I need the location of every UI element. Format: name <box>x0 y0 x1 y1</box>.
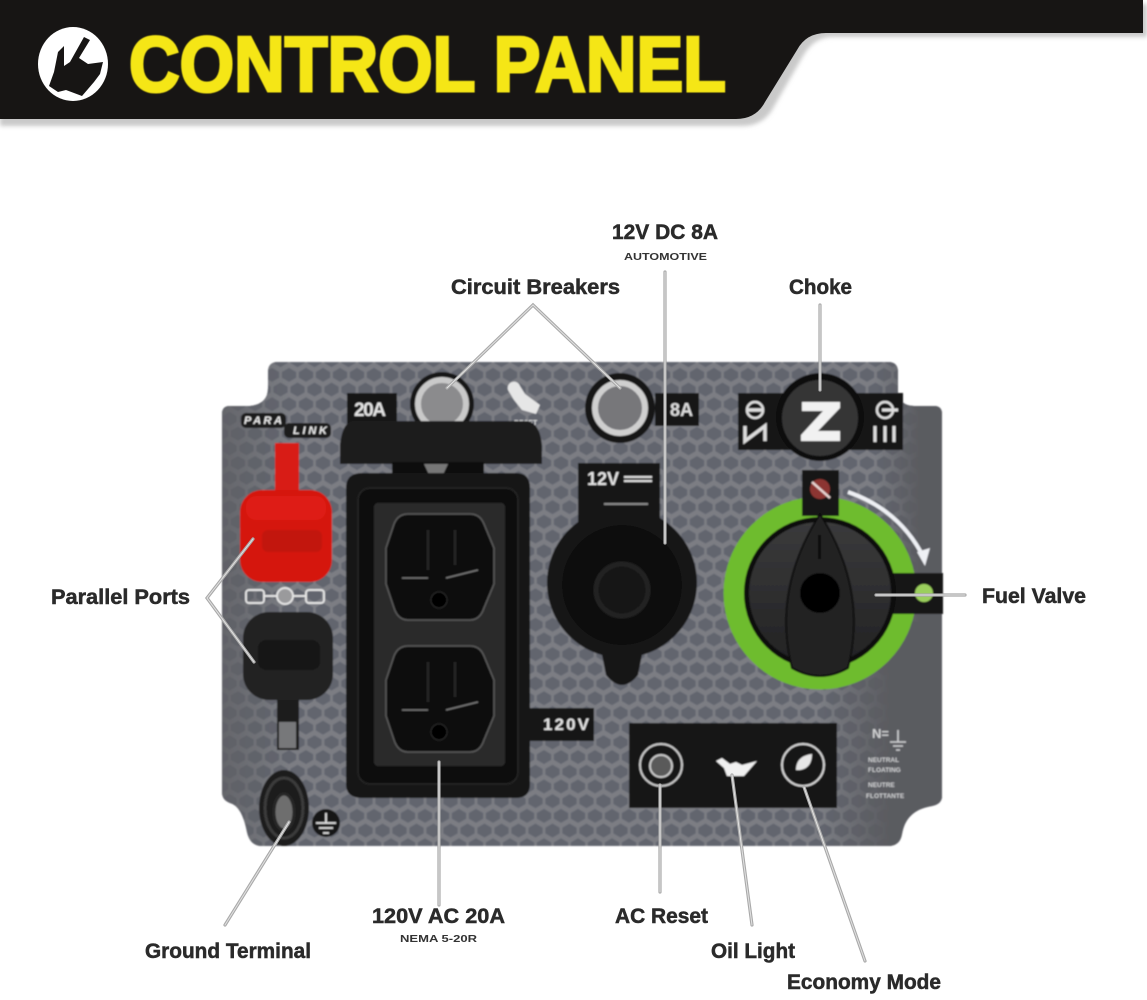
plate body <box>220 360 944 848</box>
label: economy mode: Economy Mode <box>787 971 941 994</box>
12V DC socket: 12V <box>587 469 619 489</box>
icon: logo <box>38 27 108 101</box>
20A label: 20A <box>354 400 386 421</box>
no smoking square <box>802 470 839 516</box>
label: choke: Choke <box>789 276 852 299</box>
label: AC reset: AC Reset <box>615 905 708 928</box>
ground terminal post <box>259 770 309 846</box>
label: oil light: Oil Light <box>711 940 795 963</box>
choke control <box>738 373 903 461</box>
rotary knob <box>744 517 896 669</box>
pointer: economy mode <box>804 787 865 961</box>
20A label <box>347 393 397 426</box>
icon: AC reset <box>640 744 682 786</box>
right circuit breaker: 8A <box>670 400 693 420</box>
neutral floating note: FLOTTANTE <box>866 793 905 800</box>
pointer: oil light <box>732 775 752 925</box>
label: fuel valve: Fuel Valve <box>982 585 1086 608</box>
reset icon <box>508 382 540 427</box>
outlet assembly <box>340 421 542 798</box>
icon: ground symbol <box>312 809 340 837</box>
outlet lower <box>386 646 494 752</box>
black parallel port cap <box>243 612 333 750</box>
outlet housing <box>346 473 530 798</box>
outlet upper <box>386 514 494 620</box>
pointer: AC reset <box>658 785 662 892</box>
120V label: 120V <box>543 715 590 734</box>
valve notch <box>893 573 943 614</box>
reset icon: RESET <box>514 420 538 427</box>
left circuit breaker <box>410 372 474 436</box>
icon: oil lamp <box>716 758 757 776</box>
parallel icon row <box>246 588 324 604</box>
pointer: fuel valve <box>876 593 965 597</box>
header banner <box>0 0 1147 126</box>
icon: economy leaf <box>782 744 824 786</box>
label: NEMA 5-20R: NEMA 5-20R <box>400 934 478 945</box>
icon: choke Z <box>801 402 840 441</box>
parallel link badge <box>241 413 331 438</box>
parallel link badge: LINK <box>293 425 328 437</box>
pointer: circuit breakers <box>447 305 620 388</box>
label: 12V DC 8A: 12V DC 8A <box>612 221 718 244</box>
label: 120V AC 20A: 120V AC 20A <box>372 905 505 928</box>
label: circuit breakers: Circuit Breakers <box>451 276 620 299</box>
label: automotive: AUTOMOTIVE <box>624 252 707 263</box>
pointer: parallel ports <box>207 539 254 662</box>
pointer: 120V AC <box>437 762 441 905</box>
title: CONTROL PANEL <box>129 20 726 108</box>
parallel link badge: PARA <box>244 415 282 427</box>
panel: generator control plate <box>220 360 944 848</box>
neutral floating note: NEUTRE <box>868 782 895 789</box>
outlet cover flap <box>340 421 542 464</box>
red parallel port cap <box>240 443 332 582</box>
pointer: choke <box>818 305 822 390</box>
label: parallel ports: Parallel Ports <box>51 586 190 609</box>
neutral floating note: FLOATING <box>868 767 901 774</box>
green ring <box>734 507 906 679</box>
label: ground terminal: Ground Terminal <box>145 940 311 963</box>
rotation arrow <box>848 492 924 558</box>
fuel valve <box>734 470 943 679</box>
neutral floating note <box>866 726 906 800</box>
12V DC socket <box>547 463 697 685</box>
right circuit breaker <box>585 373 699 443</box>
neutral floating note: NEUTRAL <box>868 757 899 764</box>
neutral floating note: N= <box>872 726 889 741</box>
pointer: ground terminal <box>225 822 289 925</box>
pointer: 12V DC <box>663 272 667 543</box>
indicator panel <box>629 723 837 808</box>
120V label <box>530 708 594 741</box>
